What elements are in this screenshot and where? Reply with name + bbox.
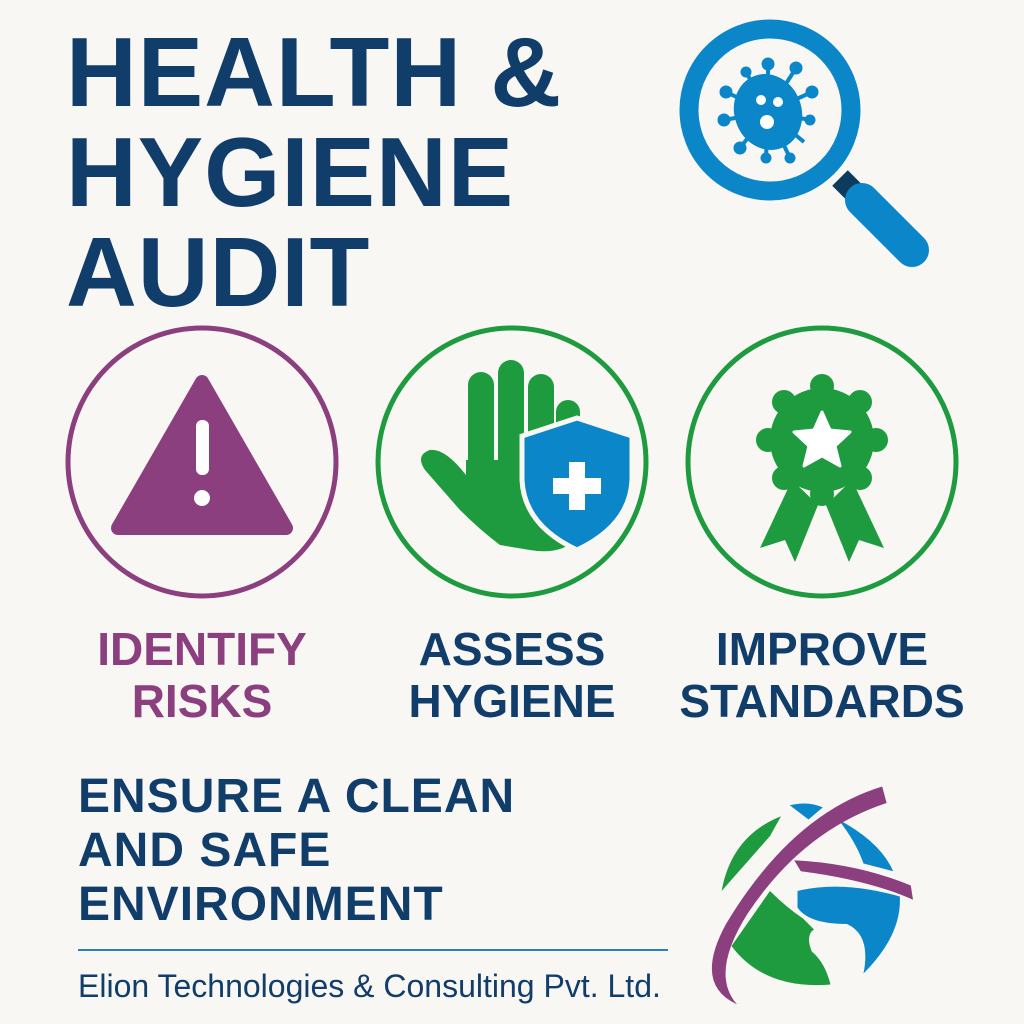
- label: identify risks: [97, 623, 307, 727]
- label: identify risks: RISKS: [132, 675, 272, 727]
- icon: warning: [68, 328, 336, 596]
- label: improve standards: STANDARDS: [679, 675, 965, 727]
- icon: award badge: [688, 328, 956, 596]
- label: identify risks: IDENTIFY: [97, 623, 307, 675]
- title: [66, 17, 562, 327]
- logo: globe: [712, 786, 913, 1004]
- title: HYGIENE: [66, 117, 514, 227]
- tagline: ENSURE A CLEAN: [78, 770, 515, 823]
- tagline: [78, 770, 515, 931]
- tagline: AND SAFE: [78, 824, 331, 877]
- label: assess hygiene: [408, 623, 616, 727]
- tagline: ENVIRONMENT: [78, 878, 444, 931]
- panel: three icon circles: [66, 326, 958, 598]
- title: AUDIT: [66, 217, 370, 327]
- title: HEALTH &: [66, 17, 562, 127]
- virus: [718, 58, 818, 163]
- footer company name: Elion Technologies & Consulting Pvt. Ltd.: [78, 968, 661, 1004]
- icon: hand with shield: [378, 328, 646, 596]
- label: improve standards: IMPROVE: [716, 623, 928, 675]
- label: improve standards: [679, 623, 965, 727]
- divider line: [78, 949, 668, 951]
- label: assess hygiene: HYGIENE: [408, 675, 616, 727]
- label: assess hygiene: ASSESS: [419, 623, 605, 675]
- icon: magnifier with virus: [680, 20, 929, 267]
